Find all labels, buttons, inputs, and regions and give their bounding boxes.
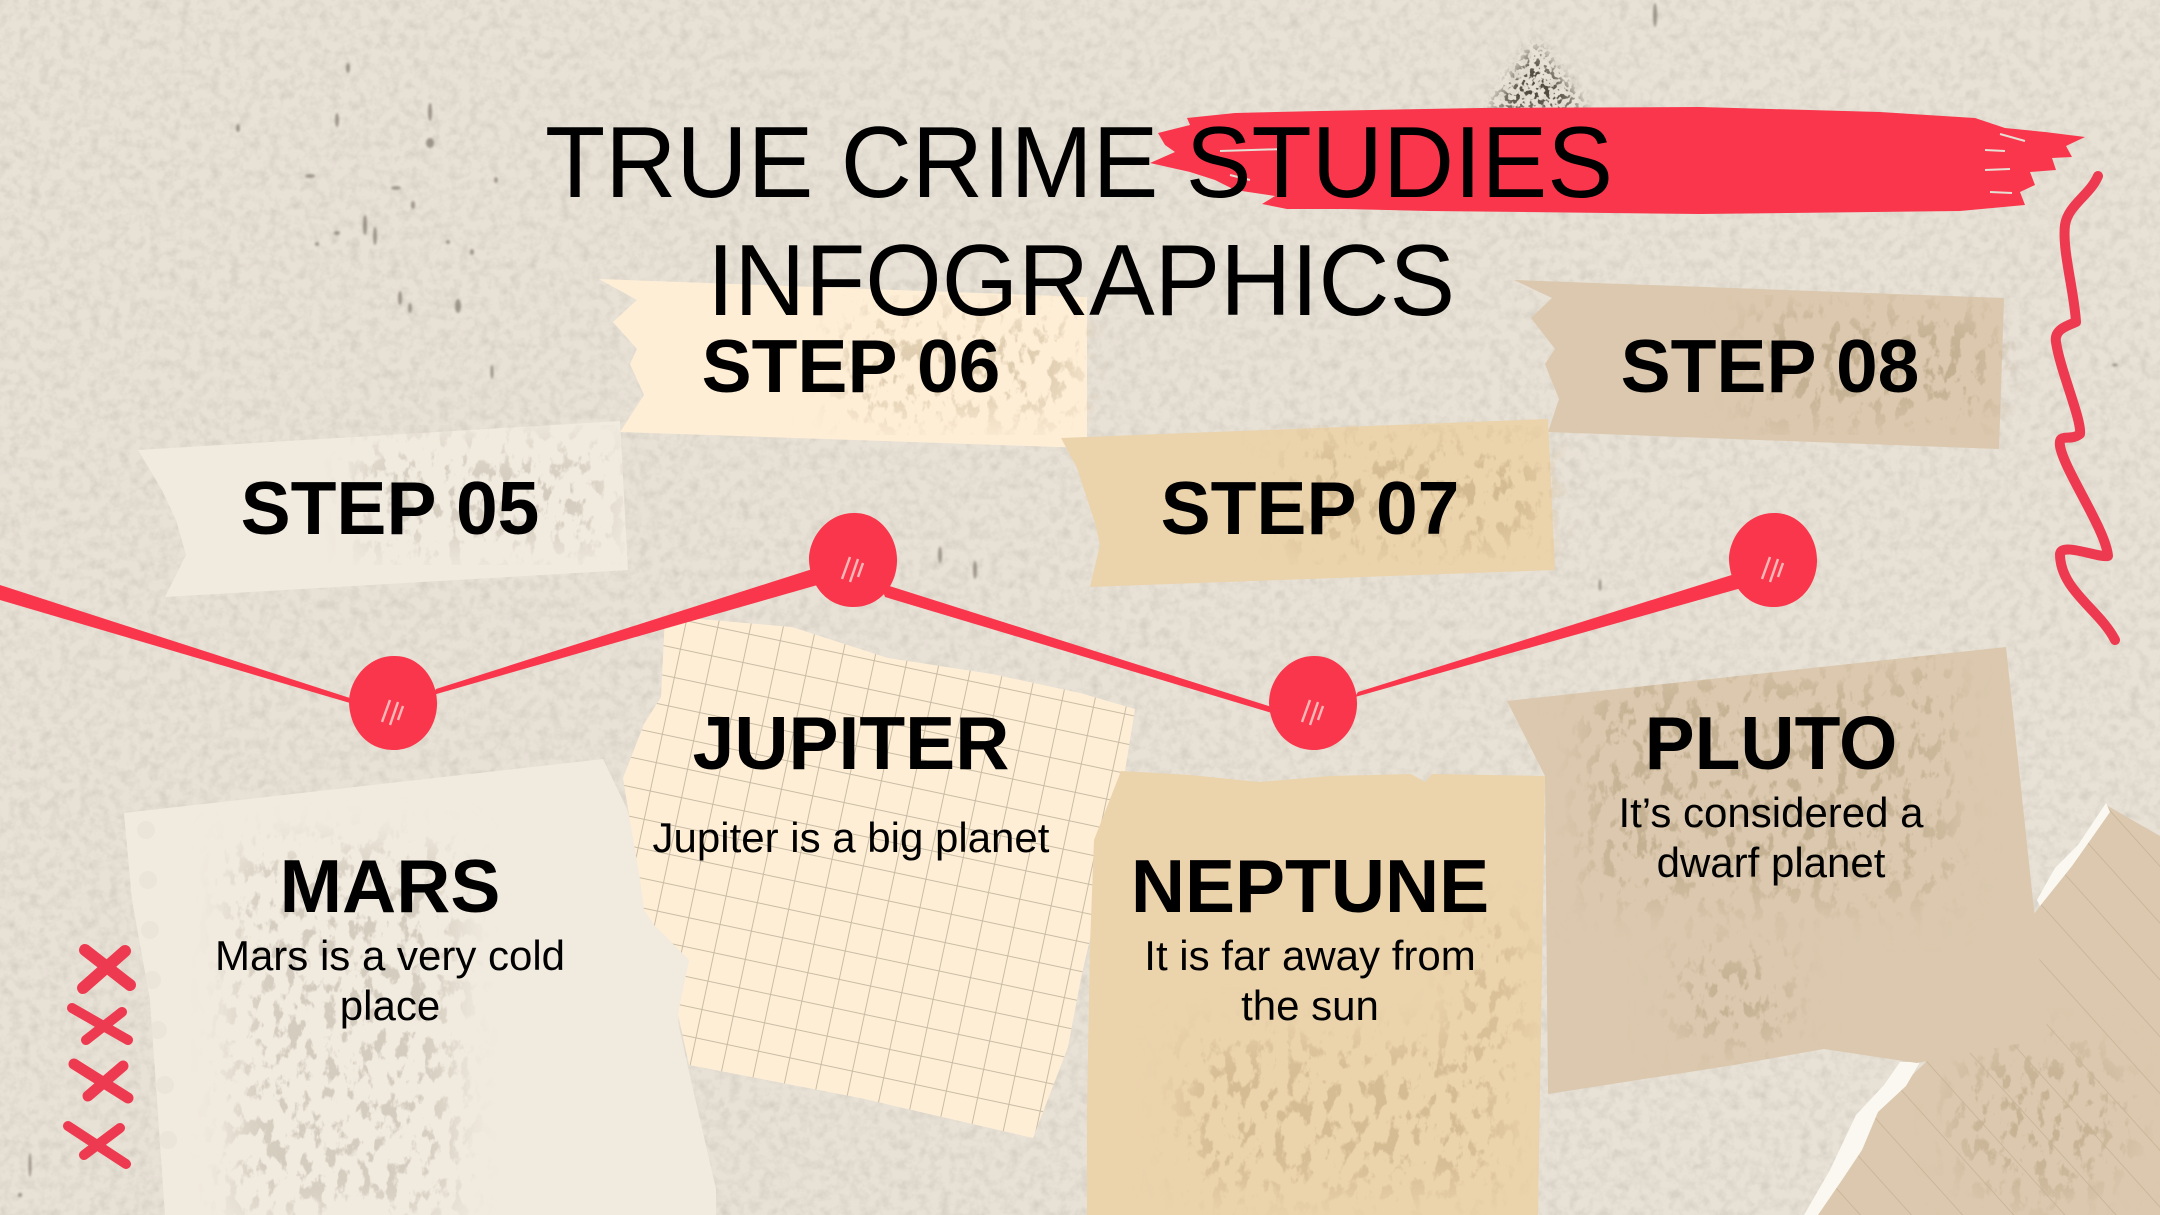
timeline: red line connecting steps — [0, 565, 1745, 714]
title: TRUE CRIME STUDIES — [545, 107, 1613, 219]
panel: Pluto note — [1507, 647, 2048, 1094]
text: Pluto: dwarf planet — [1657, 839, 1886, 886]
red brush stroke behind title — [1150, 107, 2085, 214]
red squiggle — [2056, 176, 2115, 640]
icon: red x marks — [68, 950, 130, 1164]
text: Neptune — [1131, 844, 1489, 1029]
text: Jupiter: JUPITER — [693, 701, 1009, 785]
marker: step 06 dot — [809, 513, 897, 607]
text: Mars — [215, 844, 565, 1029]
text: Neptune: NEPTUNE — [1131, 844, 1489, 928]
decorative lined torn paper — [1804, 803, 2160, 1215]
tape: step 08 — [1514, 280, 2004, 449]
marker: step 08 dot — [1729, 513, 1817, 607]
label: step 08: STEP 08 — [1621, 324, 1919, 408]
text: Neptune: the sun — [1241, 982, 1379, 1029]
title — [545, 107, 1613, 337]
panel: Jupiter grid note — [623, 616, 1135, 1138]
text: Mars: MARS — [280, 844, 500, 928]
text: Pluto: PLUTO — [1645, 701, 1897, 785]
label: step 07: STEP 07 — [1161, 466, 1459, 550]
tape: step 07 — [1061, 419, 1555, 587]
marker: step 05 dot — [349, 656, 437, 750]
text: Pluto: It’s considered a — [1618, 789, 1924, 836]
panel: Mars note — [124, 759, 716, 1215]
text: Pluto — [1618, 701, 1924, 886]
title: INFOGRAPHICS — [707, 225, 1455, 337]
tape: step 06 — [599, 279, 1087, 448]
marker: step 07 dot — [1269, 656, 1357, 750]
text: Jupiter — [653, 701, 1050, 861]
text: Mars: Mars is a very cold — [215, 932, 565, 979]
text: Mars: place — [340, 982, 440, 1029]
label: step 05: STEP 05 — [241, 466, 539, 550]
text: Neptune: It is far away from — [1144, 932, 1476, 979]
tape: step 05 — [138, 421, 628, 597]
panel: Neptune note — [1087, 771, 1545, 1215]
text: Jupiter: Jupiter is a big planet — [653, 814, 1050, 861]
label: step 06: STEP 06 — [702, 324, 1000, 408]
